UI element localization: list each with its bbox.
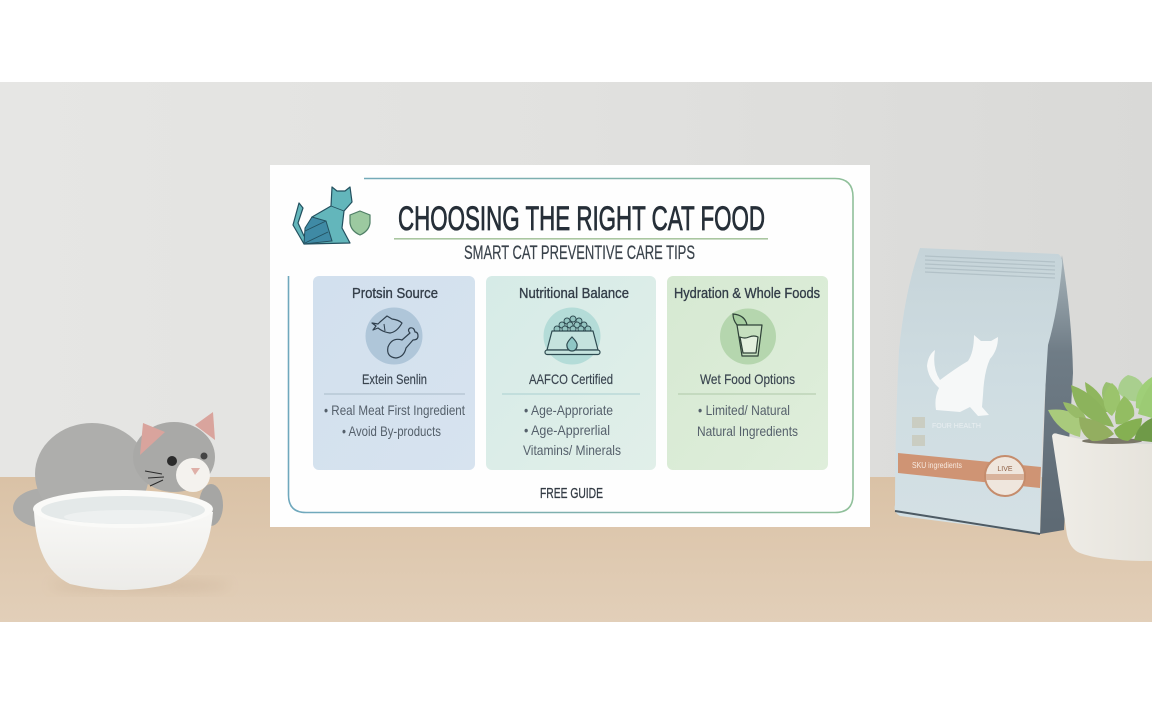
panel: nutritional balance: [486, 276, 656, 470]
wall background: [0, 82, 1152, 478]
infographic card: [270, 165, 870, 527]
title underline: [394, 238, 768, 240]
plush cat toy: [13, 412, 223, 528]
potted succulent: [1048, 375, 1152, 561]
panel heading: Protsin Source: [352, 285, 438, 302]
panel subheading: AAFCO Certified: [529, 371, 613, 387]
panel subheading: Extein Senlin: [362, 371, 427, 387]
soil: [1082, 438, 1142, 444]
bullet list: • Age-Apprerlial: [524, 422, 610, 438]
icon: fish and drumstick: [366, 308, 422, 364]
bullet list: Vitamins/ Minerals: [523, 442, 621, 458]
bullet list: [324, 402, 465, 439]
cat food bag: [895, 248, 1073, 534]
bullet list: • Avoid By-products: [342, 423, 441, 439]
bag front: [895, 248, 1062, 534]
bag seal: [985, 456, 1025, 496]
bag small badges: [912, 417, 925, 446]
bullet list: • Age-Approriate: [524, 402, 613, 418]
icon: food bowl with water drop: [544, 308, 600, 364]
rounded frame border: [288, 178, 853, 512]
white water bowl: [33, 490, 230, 591]
panel heading: Hydration & Whole Foods: [674, 285, 820, 302]
panel: protein source: [313, 276, 475, 470]
panel subheading: Wet Food Options: [700, 371, 795, 387]
bag side gusset: [1040, 255, 1073, 534]
cat food bag: SKU ingredients: [912, 461, 962, 470]
icon: glass with leaf: [720, 308, 776, 364]
bag seal: LIVE: [997, 466, 1013, 473]
bag orange band: [898, 453, 1041, 488]
bag cat silhouette: [927, 335, 998, 416]
subtitle: SMART CAT PREVENTIVE CARE TIPS: [464, 243, 695, 264]
icon: geometric cat with shield: [293, 187, 370, 244]
succulent leaves: [1048, 375, 1152, 442]
title: CHOOSING THE RIGHT CAT FOOD: [398, 200, 765, 238]
wooden table: [0, 477, 1152, 622]
bullet list: [523, 402, 621, 458]
pot: [1052, 433, 1152, 561]
footer label: FREE GUIDE: [540, 485, 603, 502]
bullet list: • Real Meat First Ingredient: [324, 402, 465, 418]
bullet list: Natural Ingredients: [697, 423, 798, 439]
bag small label text: FOUR HEALTH: [932, 423, 981, 430]
panel heading: Nutritional Balance: [519, 285, 629, 302]
panel: hydration and whole foods: [667, 276, 828, 470]
bullet list: [697, 402, 798, 439]
bullet list: • Limited/ Natural: [698, 402, 790, 418]
